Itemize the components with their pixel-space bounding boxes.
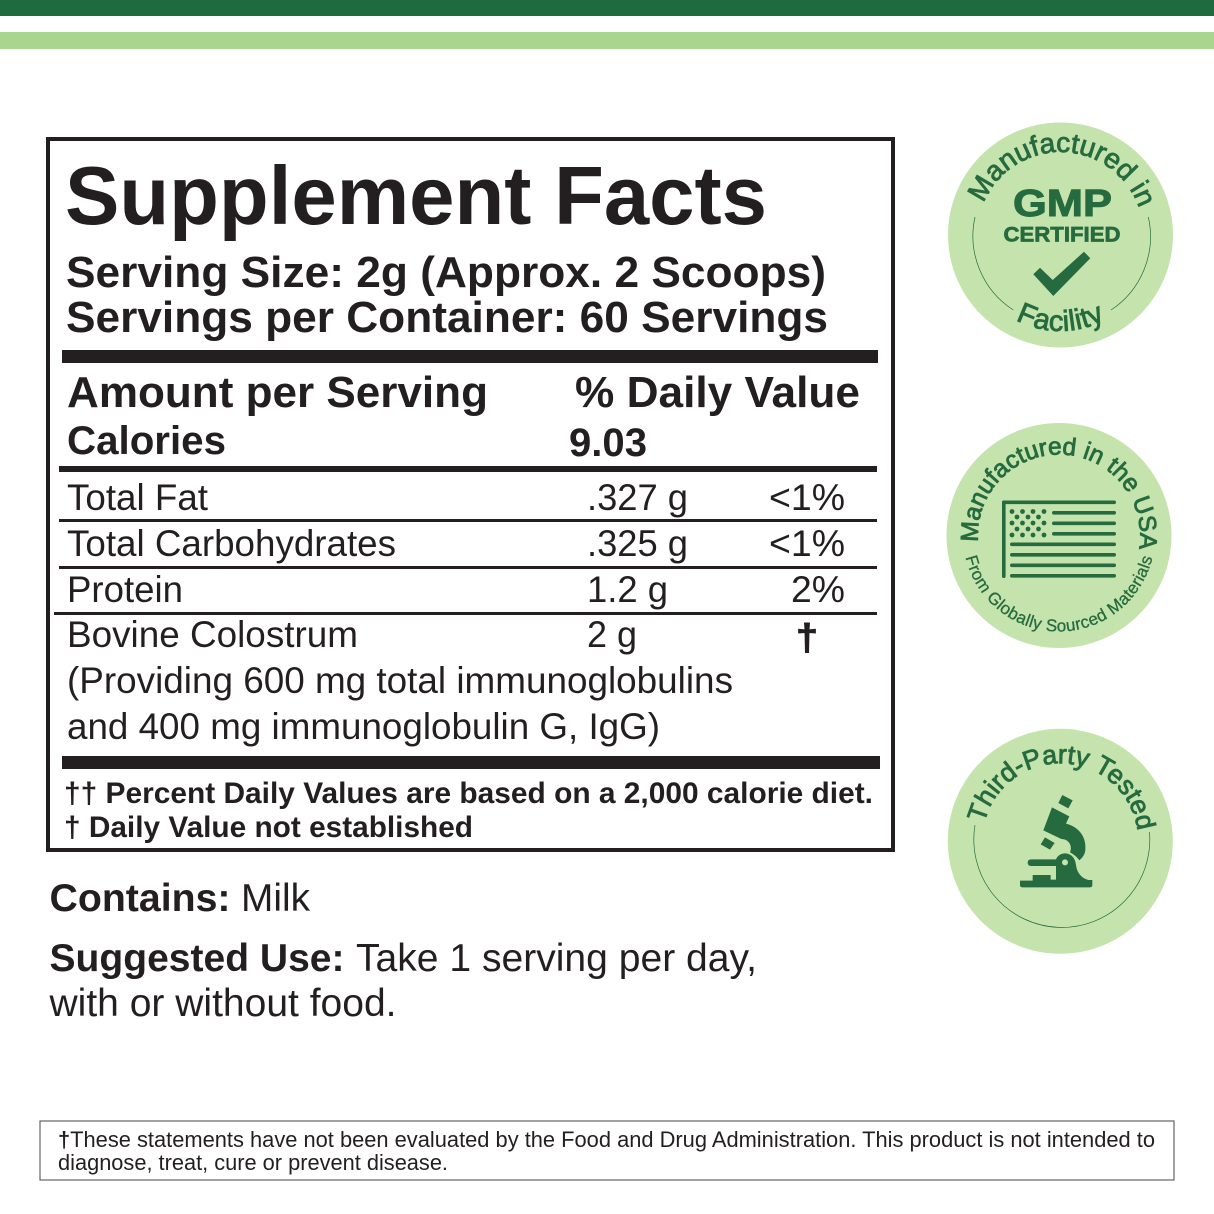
row: protein [67, 569, 845, 610]
curved text: Manufactured in the USA: Manufactured in the USA [960, 437, 1158, 550]
curved text: Facility: Facility [1017, 302, 1100, 332]
CERTIFIED: CERTIFIED [1004, 224, 1120, 246]
calories row: Calories [67, 419, 226, 463]
calories row: 9.03 [569, 421, 647, 465]
row: bovine colostrum: and 400 mg immunoglobulin G, IgG) [67, 706, 660, 747]
row: total carbohydrates: .325 g [587, 523, 688, 564]
row: bovine colostrum: Bovine Colostrum [67, 614, 358, 655]
curved text: Third-Party Tested: Third-Party Tested [966, 746, 1157, 830]
row: total fat: <1% [769, 477, 845, 518]
serving information: Serving Size: 2g (Approx. 2 Scoops) [66, 248, 826, 297]
row: bovine colostrum: (Providing 600 mg total immunoglobulins [67, 660, 733, 701]
row: bovine colostrum: † [796, 617, 818, 658]
row: protein: Protein [67, 569, 183, 610]
row: total fat [67, 477, 845, 518]
heading: Supplement Facts: Supplement Facts [65, 149, 767, 242]
row: total carbohydrates: <1% [769, 523, 845, 564]
footnotes [64, 777, 873, 844]
row: bovine colostrum: 2 g [587, 614, 637, 655]
top light green band [0, 32, 1214, 49]
badge: GMP certified [948, 122, 1173, 348]
column headers: amount and daily value: Amount per Serving [67, 368, 488, 417]
text: contains milk [50, 877, 310, 920]
footnotes: † Daily Value not established [64, 811, 473, 844]
footnotes: †† Percent Daily Values are based on a 2,000 calorie diet. [64, 777, 873, 810]
row: protein: 2% [791, 569, 845, 610]
row: total carbohydrates: Total Carbohydrates [67, 523, 396, 564]
badge: third-party tested [948, 728, 1173, 954]
panel: FDA disclaimer: diagnose, treat, cure or prevent disease. [58, 1150, 448, 1175]
badge: manufactured in the USA [946, 423, 1172, 648]
column headers: amount and daily value [67, 368, 860, 417]
text: contains milk: Contains: [50, 877, 231, 920]
icon: microscope [1020, 795, 1092, 887]
column headers: amount and daily value: % Daily Value [575, 368, 860, 417]
panel: FDA disclaimer: †These statements have not been evaluated by the Food and Drug Administration. This product is not intended to [58, 1127, 1155, 1152]
serving information: Servings per Container: 60 Servings [66, 293, 828, 342]
curved text: Manufactured in: Manufactured in [967, 134, 1152, 208]
top dark green band [0, 0, 1214, 16]
row: total fat: Total Fat [67, 477, 209, 518]
text: suggested use [48, 937, 757, 1025]
curved text: From Globally Sourced Materials: From Globally Sourced Materials [966, 555, 1152, 632]
GMP: GMP [1013, 183, 1112, 225]
icon: check mark [1033, 252, 1090, 296]
row: protein: 1.2 g [587, 569, 668, 610]
row: bovine colostrum [67, 614, 818, 747]
text: suggested use: with or without food. [48, 982, 396, 1025]
row: total fat: .327 g [587, 477, 688, 518]
panel: supplement facts label [48, 139, 893, 850]
calories row [67, 419, 647, 465]
text: suggested use: Take 1 serving per day, [356, 937, 757, 980]
panel: FDA disclaimer [40, 1121, 1174, 1180]
text: contains milk: Milk [241, 877, 310, 920]
text: suggested use: Suggested Use: [50, 937, 344, 980]
icon: American flag [1002, 500, 1116, 578]
row: total carbohydrates [67, 523, 845, 564]
serving information [66, 248, 828, 342]
